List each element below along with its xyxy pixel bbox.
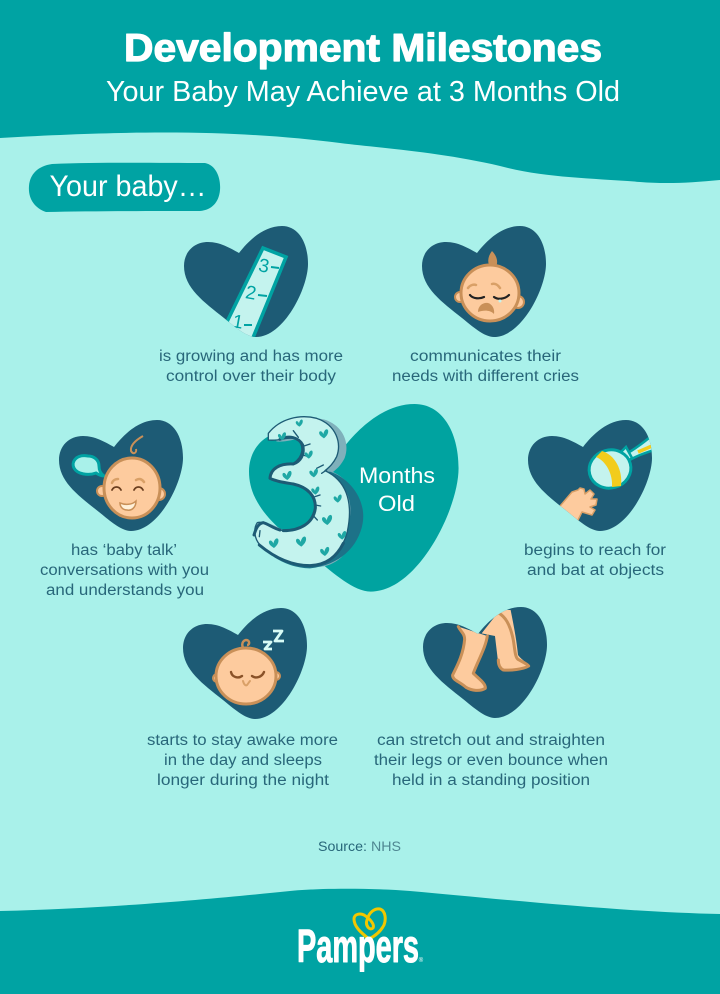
icon: heart with hand and rattle [528, 420, 654, 531]
caption: needs with different cries [392, 368, 579, 385]
caption: is growing and has more [159, 348, 343, 365]
caption: starts to stay awake more [147, 732, 338, 749]
illustrated number 3 [254, 417, 363, 568]
icon: heart with ruler: 2 [244, 282, 258, 305]
pill: your baby: Your baby… [50, 170, 206, 203]
icon: heart with smiling baby [59, 420, 183, 531]
caption [374, 732, 608, 789]
caption [147, 732, 338, 789]
source note: Source: NHS [318, 839, 401, 854]
caption: longer during the night [157, 772, 330, 789]
milestone: baby talk [40, 420, 209, 599]
milestone: cries [392, 226, 579, 385]
big heart [249, 404, 459, 592]
badge label [359, 463, 435, 516]
caption: their legs or even bounce when [374, 752, 608, 769]
caption: control over their body [166, 368, 336, 385]
pampers logo [297, 909, 424, 972]
pampers logo: ® [419, 957, 424, 964]
caption: held in a standing position [392, 772, 590, 789]
badge label: Months [359, 463, 435, 488]
caption: begins to reach for [524, 542, 666, 559]
caption: and understands you [46, 582, 204, 599]
title: Development Milestones [124, 27, 602, 70]
caption: communicates their [410, 348, 561, 365]
icon: heart with ruler: 3 [257, 255, 271, 278]
caption [524, 542, 666, 579]
caption: can stretch out and straighten [377, 732, 605, 749]
icon: heart with ruler: 1 [231, 311, 245, 334]
caption [392, 348, 579, 385]
caption [159, 348, 343, 385]
subtitle: Your Baby May Achieve at 3 Months Old [106, 76, 620, 108]
milestone: reach [524, 420, 666, 579]
caption [40, 542, 209, 599]
footer band [0, 889, 720, 994]
caption: and bat at objects [527, 562, 664, 579]
caption: has ‘baby talk’ [71, 542, 177, 559]
icon: heart with baby legs [423, 607, 547, 718]
milestone: growing [159, 226, 343, 385]
icon: heart with ruler [184, 226, 308, 345]
central badge: 3 months old [249, 404, 459, 592]
icon: heart with crying baby [422, 226, 546, 337]
milestone: legs [374, 607, 608, 789]
badge label: Old [378, 491, 415, 516]
caption: in the day and sleeps [164, 752, 322, 769]
milestone: sleep [147, 608, 338, 789]
pill: your baby [29, 163, 220, 212]
caption: conversations with you [40, 562, 209, 579]
icon: heart with sleeping baby [183, 608, 307, 719]
header band [0, 0, 720, 183]
pampers logo: Pampers [297, 920, 419, 972]
